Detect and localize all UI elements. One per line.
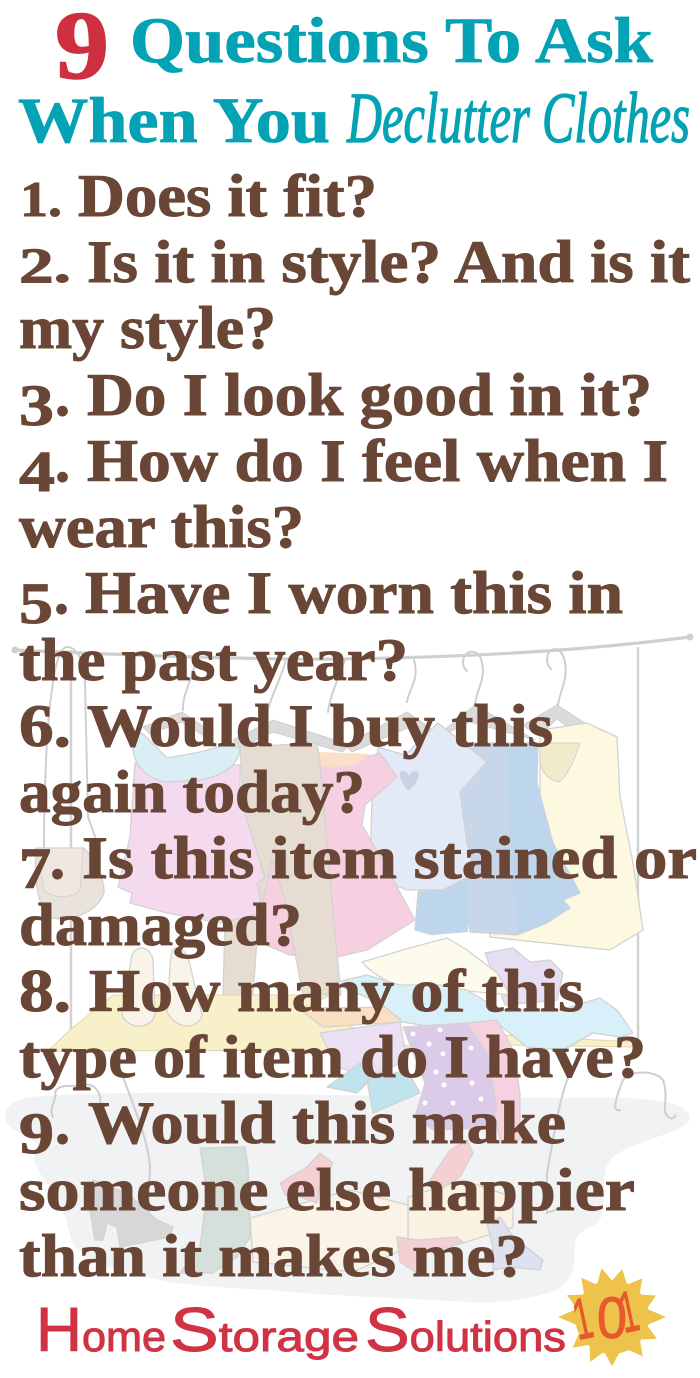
logo wordmark: Solutions (365, 1296, 566, 1365)
hanger shoulders (143, 705, 588, 752)
handbag flap (37, 848, 83, 897)
background clothes rack illustration (5, 634, 694, 1302)
blue shoe (487, 1217, 543, 1270)
logo wordmark: Home (36, 1296, 166, 1365)
question 4: wear this? (19, 494, 304, 560)
question 1: 1. (20, 171, 62, 227)
handbag strap (44, 647, 100, 850)
question 3: 3 (19, 373, 54, 438)
question 7: damaged? (19, 892, 302, 958)
logo wordmark: Storage (170, 1296, 359, 1365)
pink dress (262, 753, 415, 958)
rack posts (71, 647, 638, 1048)
question 5 (19, 560, 623, 693)
cream folded stack (362, 938, 510, 1000)
sun 101 numerals (567, 1278, 644, 1353)
question 5: . (54, 560, 69, 626)
question 2 (19, 229, 690, 361)
question 9: Would this make (88, 1090, 566, 1156)
question 5: Have I worn this in (85, 560, 623, 626)
yellow top (490, 723, 643, 950)
pink shoes (280, 1140, 473, 1273)
question 7: 7 (19, 836, 51, 901)
pink blouse (118, 763, 265, 923)
table legs and hooks (52, 1072, 675, 1217)
sun 101 numerals: 0 (597, 1286, 627, 1351)
blue collar (133, 733, 240, 782)
question 4 (19, 428, 668, 560)
question 9: than it makes me? (19, 1223, 528, 1289)
sun 101 numerals: 1 (567, 1285, 598, 1353)
blue scarf ends (327, 1063, 420, 1113)
question 2: Is it in style? And is it (87, 229, 690, 295)
clothes rail (15, 637, 690, 659)
question 5: 5 (19, 571, 53, 636)
rail end caps (12, 634, 694, 654)
question 2: my style? (19, 295, 276, 361)
blue cardigan (415, 743, 580, 935)
logo: Home Storage Solutions 101 (36, 1266, 666, 1366)
question 2: 2. (19, 237, 71, 293)
light blue sweater (333, 975, 633, 1050)
question 7 (19, 825, 697, 958)
question 6: again today? (19, 759, 365, 825)
lavender sweater (485, 948, 563, 1005)
question 8: 8. (19, 958, 71, 1024)
question 9: 9 (19, 1101, 54, 1166)
question 8: How many of this (89, 958, 584, 1024)
boxes (250, 1180, 513, 1272)
clothes pile (298, 938, 633, 1140)
question 4: . (55, 428, 70, 494)
question 1: Does it fit? (78, 163, 377, 229)
hanger hooks (183, 649, 566, 712)
question 6 (19, 693, 553, 825)
question 9: someone else happier (19, 1157, 635, 1223)
question 7: Is this item stained or (82, 825, 697, 891)
title (18, 0, 690, 158)
question 6: Would I buy this (87, 693, 553, 759)
question 9 (19, 1090, 635, 1289)
question 4: 4 (19, 439, 55, 504)
handbag body (36, 848, 104, 919)
table top (48, 995, 637, 1051)
grey heels (90, 1180, 173, 1247)
title line two: When You (18, 85, 330, 157)
cardigan front panel (415, 743, 580, 935)
pink scarf (467, 1020, 520, 1140)
question 7: . (50, 825, 65, 891)
sun 101 numerals: 1 (613, 1278, 644, 1346)
question 3: Do I look good in it? (87, 362, 652, 428)
right shoebox (408, 1180, 513, 1247)
question 9: . (55, 1090, 70, 1156)
shelf shoes (122, 948, 202, 1026)
lavender t-shirt (370, 723, 487, 890)
sun badge (558, 1266, 666, 1366)
beige pants (223, 743, 341, 995)
logo wordmark (36, 1296, 566, 1365)
question 8 (19, 958, 646, 1090)
yellow top neckline (540, 743, 580, 782)
lavender scarf (320, 1022, 407, 1077)
heart on t-shirt (400, 771, 419, 791)
tall green boot (180, 1147, 250, 1273)
question 6: 6. (19, 693, 71, 759)
question list (19, 163, 697, 1289)
peach garment (298, 1007, 413, 1027)
polka dot scarf (403, 1023, 497, 1130)
left shoebox (250, 1190, 408, 1272)
question 4: How do I feel when I (87, 428, 668, 494)
floor shadow (5, 1093, 690, 1302)
title line one: Questions To Ask (130, 5, 654, 77)
dress neckline (318, 752, 370, 767)
question 8: type of item do I have? (19, 1024, 646, 1090)
question 5: the past year? (19, 627, 408, 693)
question 3: . (55, 362, 70, 428)
polka dots (410, 1028, 484, 1106)
